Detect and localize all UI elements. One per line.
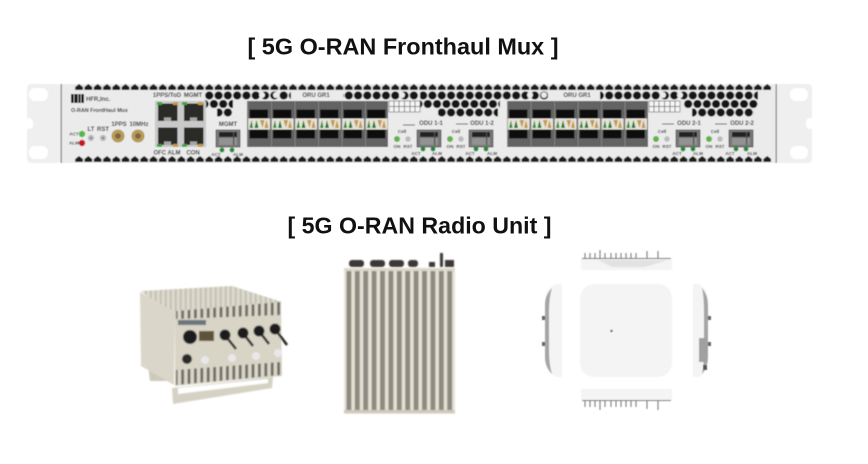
ODU 2-1 port bbox=[653, 121, 703, 156]
ODU 2-2 port: RST bbox=[715, 144, 725, 149]
bottom view bbox=[581, 389, 672, 410]
product name: O-RAN FrontHaul Mux bbox=[71, 108, 128, 114]
ODU 1-2 port: ODU 1-2 bbox=[470, 121, 494, 127]
lower fins bbox=[176, 362, 281, 385]
ODU 1-2 port: ALM bbox=[487, 151, 497, 156]
ODU 2-1 port: ACT bbox=[672, 151, 682, 156]
upper fins bbox=[176, 302, 281, 319]
rear bracket bbox=[148, 365, 166, 381]
RJ45 port block bbox=[153, 93, 206, 156]
ODU 1-2 port bbox=[447, 121, 497, 156]
ODU 2-1 port: RST bbox=[662, 144, 672, 149]
left rack ear bbox=[27, 84, 61, 163]
RJ45 port block: 1PPS/ToD bbox=[153, 93, 182, 99]
ODU 1-1 port: RST bbox=[403, 144, 413, 149]
RJ45 port block: CON bbox=[186, 150, 200, 156]
ORU group 2 ports: ORU GR1 bbox=[563, 93, 591, 99]
ODU 2-2 port: ACT bbox=[725, 151, 735, 156]
LT and RST buttons: RST bbox=[97, 127, 109, 133]
ODU 1-1 port: ODU 1-1 bbox=[419, 121, 443, 127]
ODU 1-2 port: ON bbox=[447, 144, 454, 149]
ODU 1-2 port: Cell bbox=[452, 129, 460, 134]
ODU 2-2 port: Cell bbox=[711, 129, 719, 134]
heatsink body bbox=[344, 269, 455, 413]
LT and RST buttons: LT bbox=[88, 127, 95, 133]
ODU 1-2 port: RST bbox=[456, 144, 466, 149]
right view bbox=[693, 284, 711, 377]
top view bbox=[581, 250, 672, 270]
left view bbox=[542, 284, 562, 377]
RJ45 port block: MGMT bbox=[184, 93, 202, 99]
MGMT SFP port: ACT bbox=[211, 152, 221, 157]
MGMT SFP port: ALM bbox=[233, 152, 243, 157]
title: radio unit: [ 5G O-RAN Radio Unit ] bbox=[288, 212, 552, 238]
radio unit 1: isometric box bbox=[140, 286, 287, 404]
ODU 2-1 port: Cell bbox=[658, 129, 666, 134]
ODU 2-2 port: ON bbox=[706, 144, 713, 149]
ODU 1-1 port: ALM bbox=[432, 151, 442, 156]
radio unit 3: four-view white unit bbox=[542, 250, 711, 410]
right rack ear bbox=[776, 84, 812, 163]
connectors bbox=[178, 320, 287, 364]
ODU 1-2 port: ACT bbox=[465, 151, 475, 156]
side face bbox=[140, 292, 175, 385]
ODU 2-1 port: ON bbox=[653, 144, 660, 149]
port number grid 2 bbox=[649, 101, 680, 112]
front face bbox=[175, 302, 282, 386]
ODU 2-2 port bbox=[706, 121, 757, 156]
logo: HFR,Inc. bbox=[86, 97, 111, 103]
top connectors bbox=[349, 253, 454, 267]
timing connectors bbox=[111, 122, 149, 142]
mounting holes bbox=[25, 88, 814, 159]
front view bbox=[580, 284, 672, 377]
ORU group 2 ports bbox=[507, 93, 648, 147]
status LEDs bbox=[69, 131, 85, 146]
fronthaul mux chassis bbox=[25, 84, 814, 163]
ODU 1-1 port bbox=[394, 121, 443, 156]
status LEDs: ALM bbox=[69, 140, 79, 146]
front panel bbox=[61, 84, 776, 163]
status LEDs: ACT bbox=[69, 132, 79, 136]
bracket bbox=[172, 377, 273, 404]
ODU 2-2 port: ALM bbox=[747, 151, 757, 156]
MGMT SFP port: MGMT bbox=[219, 122, 237, 128]
RJ45 port block: OFC ALM bbox=[153, 150, 181, 156]
radio unit 2: finned panel bbox=[344, 253, 455, 414]
port number grid 1 bbox=[389, 101, 420, 112]
timing connectors: 10MHz bbox=[129, 122, 149, 128]
heatsink top bbox=[141, 286, 282, 318]
vent rows bbox=[74, 84, 771, 162]
ODU 1-1 port: ACT bbox=[411, 151, 421, 156]
ODU 2-1 port: ALM bbox=[693, 151, 703, 156]
ODU 2-1 port: ODU 2-1 bbox=[677, 121, 701, 127]
MGMT SFP port bbox=[211, 122, 243, 157]
ODU 1-1 port: ON bbox=[394, 144, 401, 149]
ODU 1-1 port: Cell bbox=[398, 129, 406, 134]
ORU group 1 ports bbox=[247, 93, 388, 147]
ODU 2-2 port: ODU 2-2 bbox=[730, 121, 754, 127]
ORU group 1 ports: ORU GR1 bbox=[302, 93, 330, 99]
title: fronthaul mux: [ 5G O-RAN Fronthaul Mux ] bbox=[248, 34, 558, 60]
logo bbox=[71, 94, 111, 103]
LT and RST buttons bbox=[88, 127, 109, 141]
timing connectors: 1PPS bbox=[111, 122, 127, 128]
